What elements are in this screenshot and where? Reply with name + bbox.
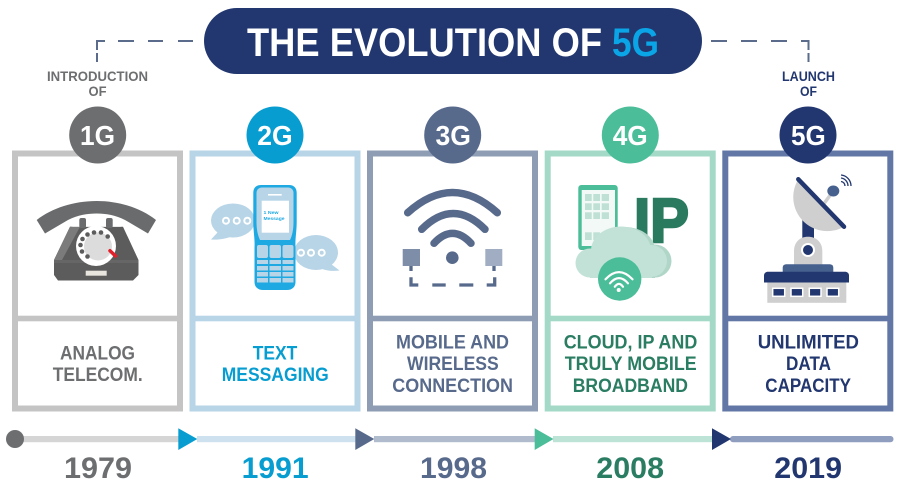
arrow: 1991 <box>178 428 197 450</box>
icon: satellite dish <box>764 175 851 303</box>
text: analog telecom: ANALOG <box>60 343 135 364</box>
label: launch of: OF <box>800 83 817 99</box>
text: analog telecom: TELECOM. <box>53 365 143 386</box>
year: 1998: 1998 <box>420 452 487 485</box>
year: 1979: 1979 <box>64 452 132 485</box>
text: text messaging <box>222 343 329 386</box>
badge: 5G: 5G <box>791 120 826 151</box>
panel: 4G cloud, IP and broadband <box>548 154 713 408</box>
arrow: 2008 <box>535 428 554 450</box>
text: cloud, IP and truly mobile broadband: TRULY MOBILE <box>565 354 697 375</box>
badge: 3G: 3G <box>436 120 471 151</box>
icon: rotary telephone <box>37 201 156 280</box>
title banner: 5G <box>612 21 659 65</box>
panel: 5G unlimited data capacity <box>725 154 890 408</box>
panel: 2G text messaging <box>192 154 358 408</box>
label: launch of: LAUNCH <box>782 68 835 84</box>
icon: mobile phone with message bubbles: Message <box>264 216 285 221</box>
year: 1991: 1991 <box>242 452 309 485</box>
panel: 1G analog telecom <box>15 154 180 408</box>
badge: 1G: 1G <box>80 120 115 151</box>
badge: 3G <box>424 106 481 164</box>
label: launch of <box>782 68 835 99</box>
label: introduction of: INTRODUCTION <box>47 68 148 84</box>
text: text messaging: MESSAGING <box>222 365 329 386</box>
icon: tablet, IP and cloud wifi <box>576 185 689 301</box>
text: cloud, IP and truly mobile broadband: CLOUD, IP AND <box>564 332 697 353</box>
text: mobile and wireless connection: CONNECTION <box>392 376 513 397</box>
badge: 2G <box>246 106 304 164</box>
arrow: 2019 <box>712 428 731 450</box>
title banner: THE EVOLUTION OF <box>247 21 602 65</box>
icon: mobile phone with message bubbles <box>211 185 340 290</box>
text: unlimited data capacity: UNLIMITED <box>758 332 859 353</box>
text: cloud, IP and truly mobile broadband: BROADBAND <box>573 376 688 397</box>
badge: 4G: 4G <box>613 120 648 151</box>
year: 2008: 2008 <box>596 452 664 485</box>
text: cloud, IP and truly mobile broadband <box>564 332 697 397</box>
text: unlimited data capacity: DATA <box>786 354 831 375</box>
text: unlimited data capacity <box>758 332 859 397</box>
year: 2019: 2019 <box>774 452 842 485</box>
label: introduction of: OF <box>88 83 107 99</box>
text: text messaging: TEXT <box>253 343 298 364</box>
badge: 1G <box>69 106 126 164</box>
badge: 5G <box>780 106 836 164</box>
dashed connector: title to 1G <box>97 41 193 62</box>
badge: 4G <box>602 106 659 164</box>
label: introduction of <box>47 68 148 99</box>
icon: wifi signal with connected nodes <box>403 192 502 285</box>
text: mobile and wireless connection <box>392 332 513 397</box>
title banner <box>204 8 702 74</box>
badge: 2G: 2G <box>257 120 293 151</box>
timeline <box>6 428 894 450</box>
text: unlimited data capacity: CAPACITY <box>765 376 851 397</box>
arrow: 1998 <box>355 428 374 450</box>
panel: 3G mobile and wireless connection <box>370 154 535 408</box>
dashed connector: title to 5G <box>711 41 808 62</box>
text: analog telecom <box>53 343 143 386</box>
icon: mobile phone with message bubbles: 1 New <box>264 210 279 215</box>
text: mobile and wireless connection: WIRELESS <box>407 354 499 375</box>
text: mobile and wireless connection: MOBILE AND <box>396 332 509 353</box>
marker: start dot <box>6 430 24 448</box>
icon: tablet, IP and cloud wifi: IP <box>634 187 689 256</box>
